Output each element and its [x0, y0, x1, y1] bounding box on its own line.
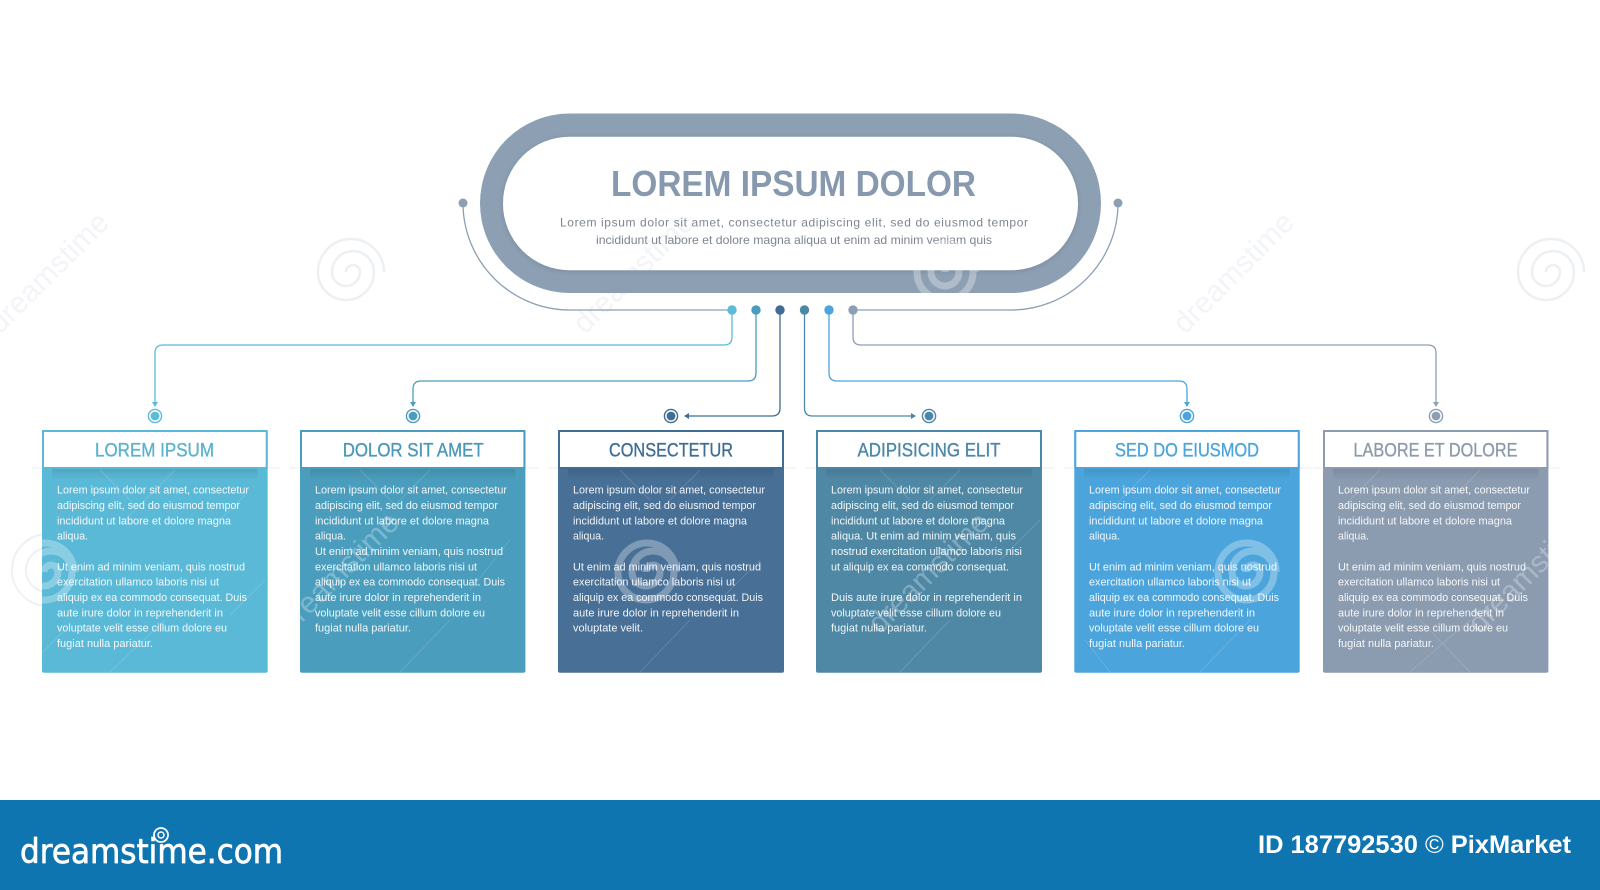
- body text: aliqua.: [573, 531, 604, 543]
- body text: fugiat nulla pariatur.: [1089, 638, 1185, 650]
- body text: exercitation ullamco laboris nisi ut: [1089, 577, 1252, 589]
- watermark overlay: dreamstime: [272, 506, 406, 640]
- body text: ut aliquip ex ea commodo consequat.: [831, 561, 1009, 573]
- connector 3 to Consectetur: [664, 305, 785, 423]
- heading: LOREM IPSUM: [95, 440, 214, 462]
- body text: Ut enim ad minim veniam, quis nostrud: [1338, 561, 1526, 573]
- body text: incididunt ut labore et dolore magna: [1338, 515, 1513, 527]
- panel: Dolor Sit Amet: [300, 430, 525, 673]
- connector 2 to Dolor Sit Amet: [406, 305, 761, 423]
- watermark overlay: dreamstime: [1462, 506, 1596, 640]
- watermark overlay: dreamstime: [1167, 206, 1301, 340]
- watermark overlay: [0, 206, 1596, 672]
- connector 4 to Adipisicing Elit: [800, 305, 936, 423]
- panel: Adipisicing Elit: [816, 430, 1042, 673]
- body text: incididunt ut labore et dolore magna: [1089, 515, 1264, 527]
- footer band: [0, 800, 1600, 890]
- image id credit: ID 187792530 © PixMarket: [1258, 831, 1572, 859]
- body text: adipiscing elit, sed do eiusmod tempor: [57, 500, 240, 512]
- heading: SED DO EIUSMOD: [1115, 440, 1259, 462]
- body text: Lorem ipsum dolor sit amet, consectetur: [1338, 485, 1530, 497]
- body text: fugiat nulla pariatur.: [315, 623, 411, 635]
- body text: voluptate velit.: [573, 623, 643, 635]
- subtitle text: incididunt ut labore et dolore magna aliqua ut enim ad minim veniam quis: [596, 233, 992, 247]
- body text: Lorem ipsum dolor sit amet, consectetur: [57, 485, 249, 497]
- body text: aliqua.: [315, 531, 346, 543]
- body text: [315, 485, 507, 635]
- body text: Lorem ipsum dolor sit amet, consectetur: [315, 485, 507, 497]
- body text: adipiscing elit, sed do eiusmod tempor: [573, 500, 756, 512]
- right arc connector: [853, 198, 1122, 310]
- body text: [57, 485, 249, 650]
- body text: adipiscing elit, sed do eiusmod tempor: [1338, 500, 1521, 512]
- body text: fugiat nulla pariatur.: [1338, 638, 1434, 650]
- body text: aliqua. Ut enim ad minim veniam, quis: [831, 531, 1016, 543]
- body text: aliqua.: [1338, 531, 1369, 543]
- body text: Duis aute irure dolor in reprehenderit in: [831, 592, 1022, 604]
- body text: nostrud exercitation ullamco laboris nisi: [831, 546, 1022, 558]
- body text: aute irure dolor in reprehenderit in: [1089, 607, 1255, 619]
- heading: LABORE ET DOLORE: [1354, 440, 1518, 462]
- body text: exercitation ullamco laboris nisi ut: [57, 577, 220, 589]
- body text: aute irure dolor in reprehenderit in: [573, 607, 739, 619]
- panel: Consectetur: [558, 430, 784, 673]
- body text: aliqua.: [1089, 531, 1120, 543]
- body text: voluptate velit esse cillum dolore eu: [1089, 623, 1259, 635]
- body text: aliqua.: [57, 531, 88, 543]
- central pill: title block: [480, 114, 1101, 293]
- panel: Sed Do Eiusmod: [1074, 430, 1300, 673]
- body text: Ut enim ad minim veniam, quis nostrud: [315, 546, 503, 558]
- body text: aliquip ex ea commodo consequat. Duis: [57, 592, 247, 604]
- body text: voluptate velit esse cillum dolore eu: [57, 623, 227, 635]
- panel: Lorem Ipsum: [42, 430, 268, 673]
- heading: CONSECTETUR: [609, 440, 733, 462]
- body text: Lorem ipsum dolor sit amet, consectetur: [831, 485, 1023, 497]
- left arc connector: [458, 198, 732, 310]
- subtitle text: Lorem ipsum dolor sit amet, consectetur adipiscing elit, sed do eiusmod tempor: [560, 216, 1028, 230]
- heading: DOLOR SIT AMET: [343, 440, 484, 462]
- body text: aliquip ex ea commodo consequat. Duis: [315, 577, 505, 589]
- body text: [573, 485, 765, 635]
- body text: Ut enim ad minim veniam, quis nostrud: [57, 561, 245, 573]
- body text: adipiscing elit, sed do eiusmod tempor: [1089, 500, 1272, 512]
- panel: Labore Et Dolore: [1323, 430, 1548, 673]
- body text: exercitation ullamco laboris nisi ut: [573, 577, 736, 589]
- body text: Ut enim ad minim veniam, quis nostrud: [573, 561, 761, 573]
- body text: incididunt ut labore et dolore magna: [57, 515, 232, 527]
- body text: incididunt ut labore et dolore magna: [315, 515, 490, 527]
- body text: aliquip ex ea commodo consequat. Duis: [1338, 592, 1528, 604]
- body text: aliquip ex ea commodo consequat. Duis: [1089, 592, 1279, 604]
- body text: [1089, 485, 1281, 650]
- body text: fugiat nulla pariatur.: [57, 638, 153, 650]
- main title: LOREM IPSUM DOLOR: [611, 163, 976, 204]
- body text: aute irure dolor in reprehenderit in: [1338, 607, 1504, 619]
- body text: incididunt ut labore et dolore magna: [831, 515, 1006, 527]
- heading: ADIPISICING ELIT: [858, 440, 1001, 462]
- body text: aute irure dolor in reprehenderit in: [315, 592, 481, 604]
- connector 5 to Sed Do Eiusmod: [824, 305, 1194, 423]
- body text: incididunt ut labore et dolore magna: [573, 515, 748, 527]
- connector 6 to Labore Et Dolore: [848, 305, 1443, 423]
- body text: Ut enim ad minim veniam, quis nostrud: [1089, 561, 1277, 573]
- connector 1 to Lorem Ipsum: [148, 305, 737, 423]
- subtitle text: [560, 216, 1028, 247]
- body text: Lorem ipsum dolor sit amet, consectetur: [573, 485, 765, 497]
- body text: aliquip ex ea commodo consequat. Duis: [573, 592, 763, 604]
- watermark overlay: dreamstime: [862, 506, 996, 640]
- body text: exercitation ullamco laboris nisi ut: [1338, 577, 1501, 589]
- body text: fugiat nulla pariatur.: [831, 623, 927, 635]
- watermark overlay: dreamstime: [567, 206, 701, 340]
- body text: Lorem ipsum dolor sit amet, consectetur: [1089, 485, 1281, 497]
- body text: voluptate velit esse cillum dolore eu: [831, 607, 1001, 619]
- body text: [1338, 485, 1530, 650]
- body text: adipiscing elit, sed do eiusmod tempor: [831, 500, 1014, 512]
- body text: voluptate velit esse cillum dolore eu: [1338, 623, 1508, 635]
- body text: aute irure dolor in reprehenderit in: [57, 607, 223, 619]
- body text: [831, 485, 1023, 635]
- body text: adipiscing elit, sed do eiusmod tempor: [315, 500, 498, 512]
- body text: voluptate velit esse cillum dolore eu: [315, 607, 485, 619]
- body text: exercitation ullamco laboris nisi ut: [315, 561, 478, 573]
- dreamstime logo: dreamstime.com: [20, 832, 283, 872]
